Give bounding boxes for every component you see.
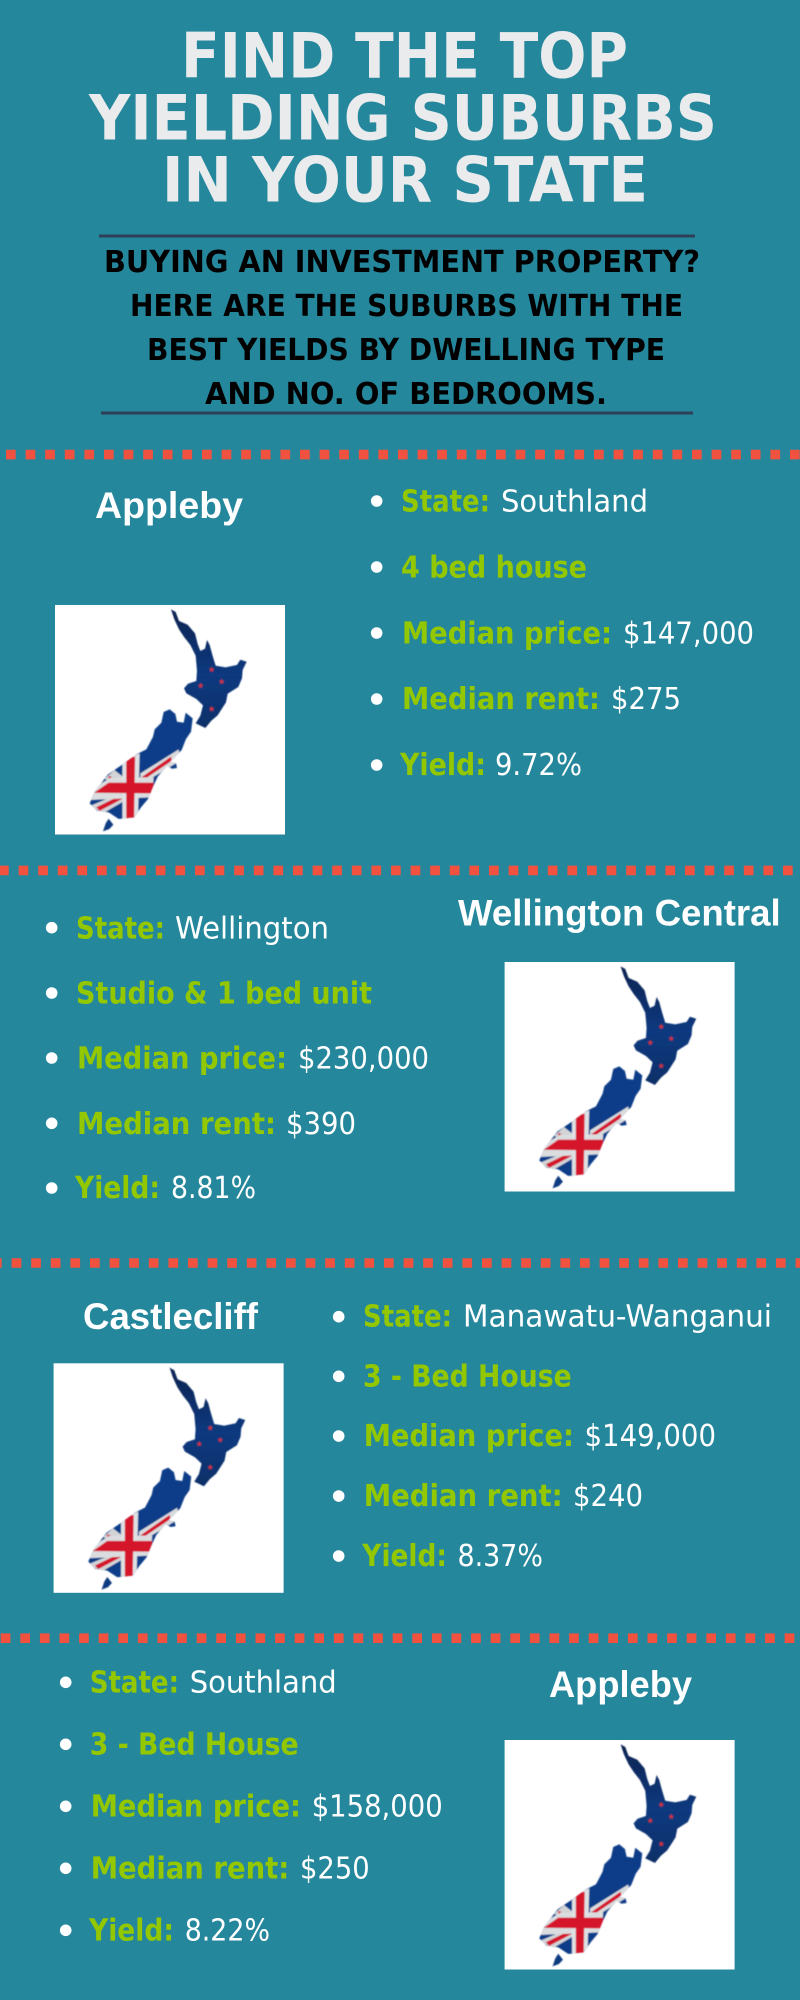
list: property facts: 8.22% <box>185 1913 270 1948</box>
subtitle block <box>99 234 700 414</box>
heading: Appleby: Appleby <box>549 1664 692 1705</box>
title: IN YOUR STATE <box>162 143 648 216</box>
list: property facts: $147,000 <box>623 616 754 651</box>
list: property facts: State: <box>401 485 490 520</box>
panel: Appleby 3 bed house <box>60 1664 735 1970</box>
list: property facts: $275 <box>611 682 681 717</box>
list: property facts <box>46 911 429 1206</box>
list: property facts: $240 <box>573 1479 643 1514</box>
list: property facts: $149,000 <box>584 1419 716 1454</box>
panel: Appleby 4 bed house <box>55 485 754 834</box>
list: property facts: Yield: <box>361 1539 447 1574</box>
title: FIND THE TOP <box>181 20 628 93</box>
list: property facts: Median price: <box>402 616 612 651</box>
panel: Wellington Central studio and 1 bed unit <box>46 893 781 1206</box>
list: property facts: Median rent: <box>402 682 600 717</box>
icon: New Zealand flag map <box>54 1363 284 1593</box>
list: property facts: Median rent: <box>364 1479 563 1514</box>
list: property facts: State: <box>76 911 165 946</box>
list: property facts: State: <box>90 1665 179 1700</box>
subtitle block: AND NO. OF BEDROOMS. <box>205 377 607 412</box>
list: property facts <box>371 485 754 783</box>
list: property facts: 8.37% <box>458 1539 543 1574</box>
list: property facts: Yield: <box>399 748 486 783</box>
list: property facts: Wellington <box>175 911 329 946</box>
heading: Wellington Central: Wellington Central <box>458 893 781 934</box>
list: property facts: 3 - Bed House <box>363 1359 572 1394</box>
subtitle block: BEST YIELDS BY DWELLING TYPE <box>147 333 665 368</box>
list: property facts: $390 <box>286 1107 356 1142</box>
title <box>88 20 717 216</box>
list: property facts: Manawatu-Wanganui <box>463 1300 772 1335</box>
list: property facts: State: <box>363 1300 452 1335</box>
list: property facts: Studio & 1 bed unit <box>76 977 372 1012</box>
icon: New Zealand flag map <box>505 1740 735 1970</box>
subtitle block: HERE ARE THE SUBURBS WITH THE <box>130 289 683 324</box>
panel: Castlecliff 3 bed house <box>54 1296 772 1593</box>
list: property facts: Median price: <box>91 1789 301 1824</box>
list: property facts: Median rent: <box>91 1851 289 1886</box>
icon: New Zealand flag map <box>505 962 735 1192</box>
heading: Castlecliff: Castlecliff <box>83 1296 259 1337</box>
list: property facts: 4 bed house <box>401 550 587 585</box>
icon: New Zealand flag map <box>55 605 285 834</box>
list: property facts: Median price: <box>77 1042 287 1077</box>
list: property facts: $230,000 <box>298 1042 429 1077</box>
heading: Appleby: Appleby <box>95 485 243 526</box>
list: property facts: 9.72% <box>495 748 582 783</box>
list: property facts: $250 <box>300 1851 370 1886</box>
title: YIELDING SUBURBS <box>88 81 717 154</box>
list: property facts: Southland <box>501 485 648 520</box>
list: property facts: Median price: <box>364 1419 574 1454</box>
subtitle block: BUYING AN INVESTMENT PROPERTY? <box>104 245 700 280</box>
list: property facts <box>60 1665 443 1948</box>
list: property facts: 3 - Bed House <box>90 1727 299 1762</box>
list: property facts: Median rent: <box>77 1107 276 1142</box>
list: property facts: 8.81% <box>171 1171 256 1206</box>
list: property facts: Yield: <box>88 1913 174 1948</box>
list: property facts: Yield: <box>74 1171 160 1206</box>
list: property facts: $158,000 <box>312 1789 443 1824</box>
list: property facts <box>333 1300 772 1574</box>
list: property facts: Southland <box>190 1665 337 1700</box>
